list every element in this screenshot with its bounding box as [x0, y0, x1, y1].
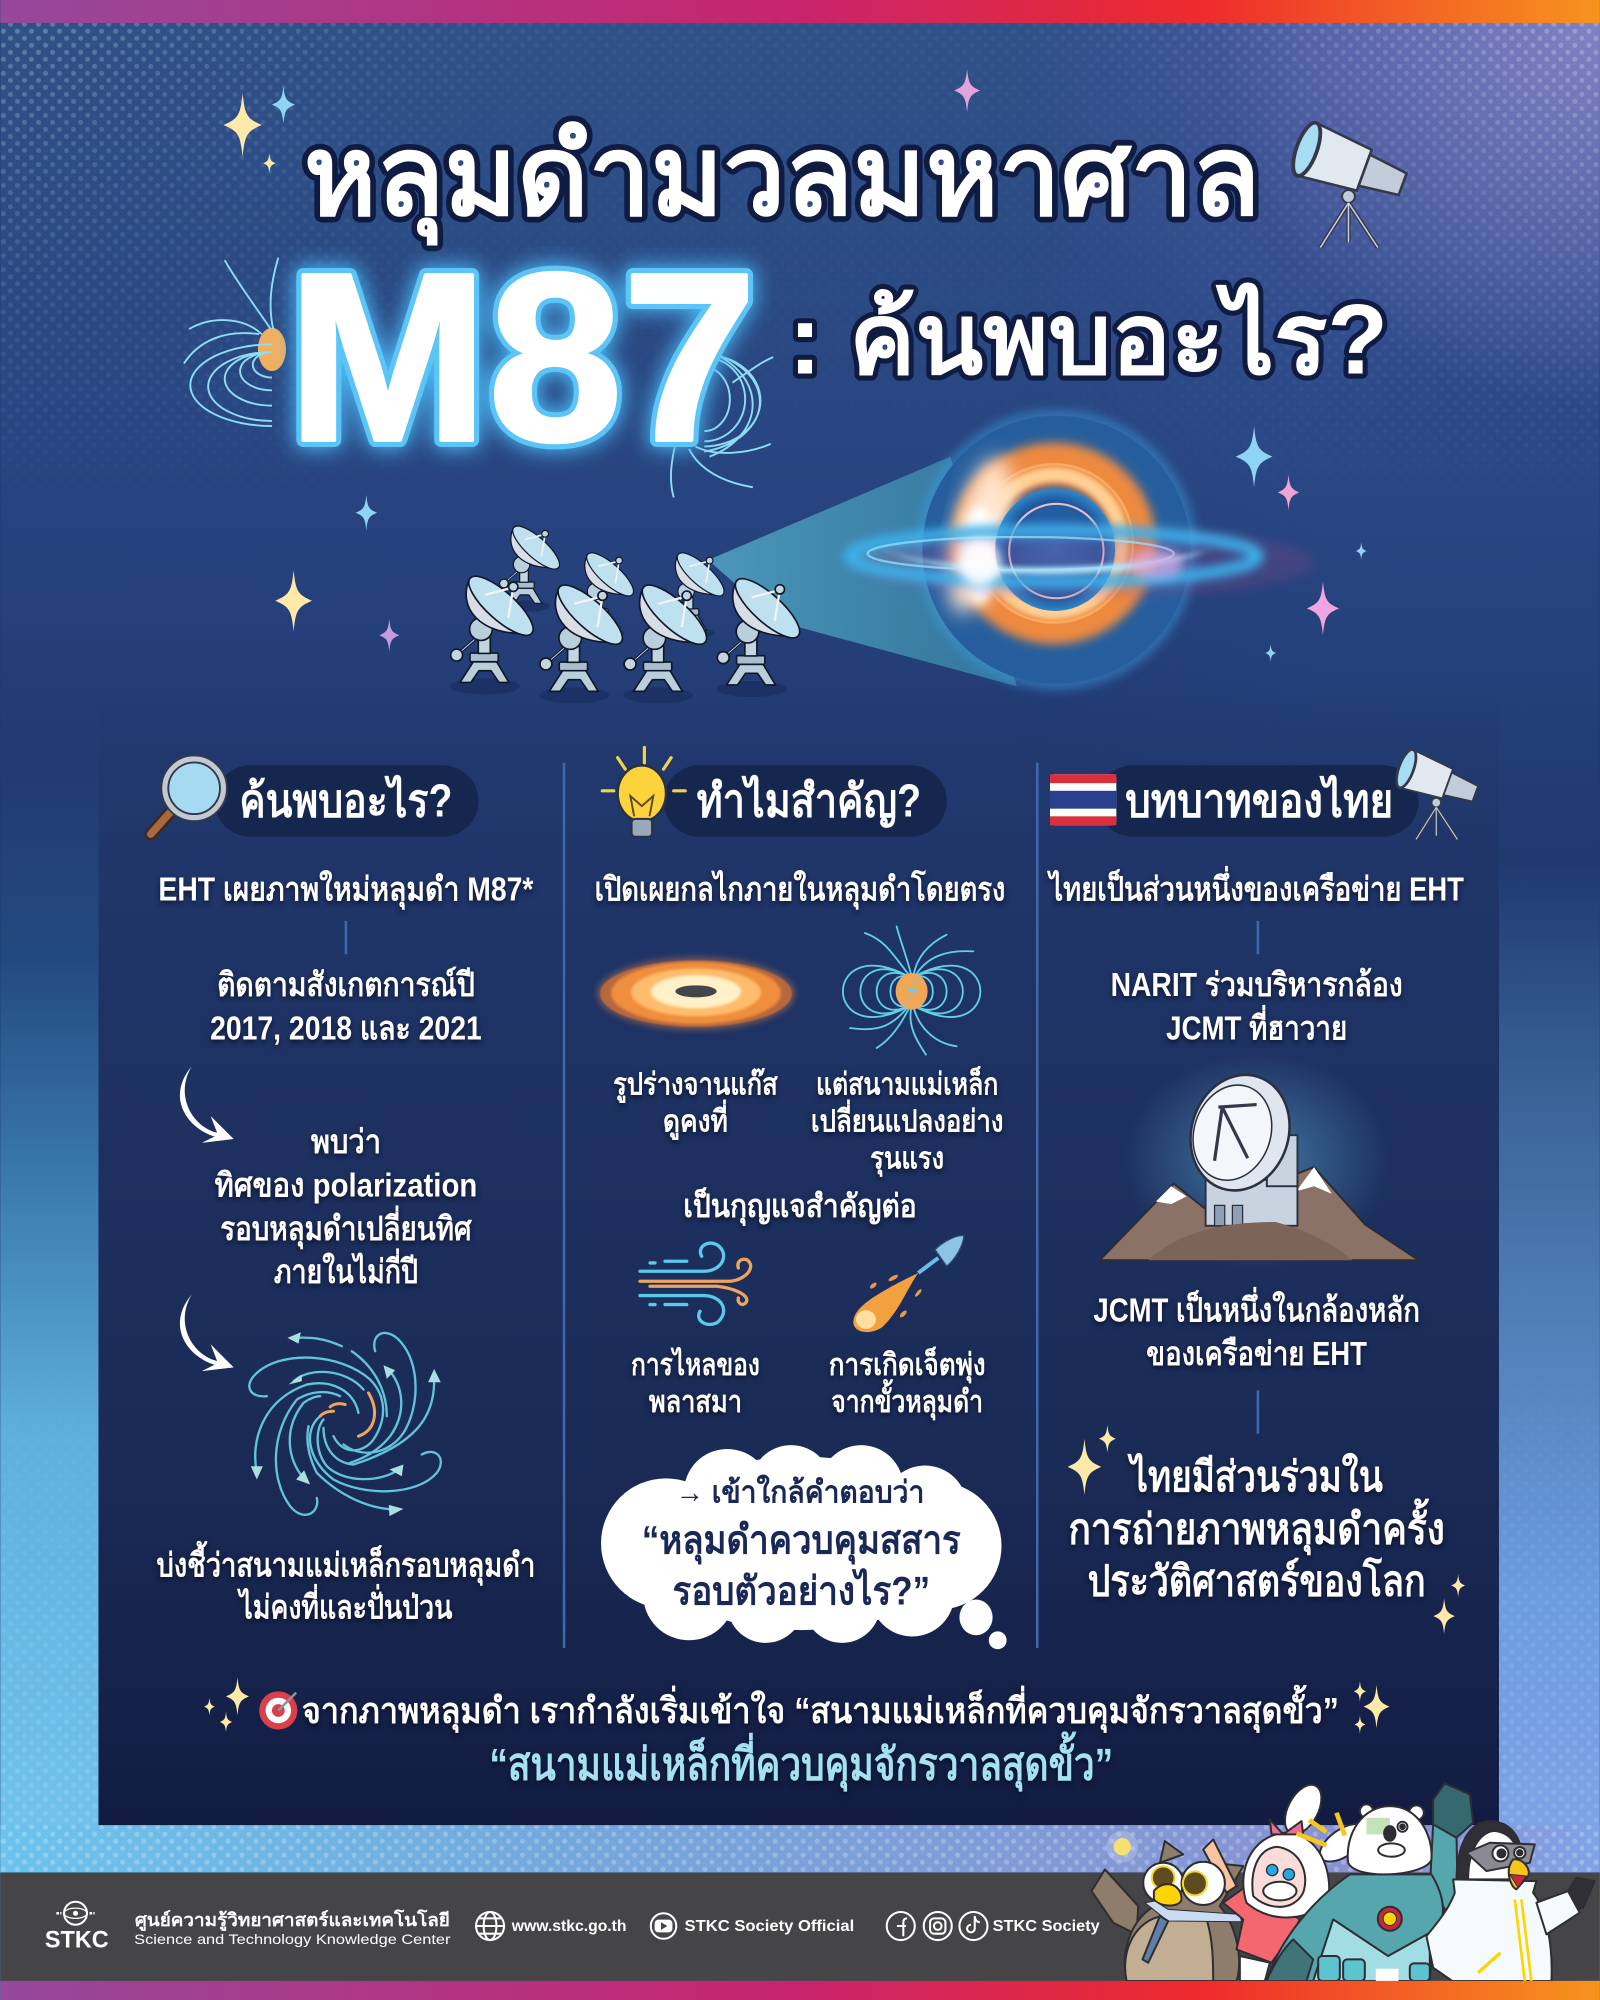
- footer: STKC logo: STKC: [45, 1927, 109, 1954]
- halftone strip under panel: [0, 1825, 1600, 1874]
- text: network: [1047, 866, 1464, 1048]
- footer: youtube: [651, 1913, 854, 1939]
- text: mechanism: เปิดเผยกลไกภายในหลุมดำโดยตรง: [595, 870, 1005, 911]
- icon: plasma flow: [640, 1243, 751, 1324]
- mascot: rabbit girl: [1223, 1779, 1373, 1981]
- text: column 1 top: พบว่า: [311, 1124, 381, 1161]
- text: column 1 top: ทิศของ polarization: [215, 1167, 477, 1204]
- footer: youtube: STKC Society Official: [685, 1918, 854, 1935]
- text: plasma and jet captions: จากขั้วหลุมดำ: [831, 1379, 983, 1421]
- decorative stars: [223, 69, 1367, 662]
- mascot: penguin: [1426, 1821, 1595, 1981]
- text: column 1 top: รอบหลุมดำเปลี่ยนทิศ: [220, 1205, 472, 1250]
- illustration: turbulent spiral: [249, 1332, 441, 1516]
- text: column 1 bottom: ไม่คงที่และปั่นป่วน: [237, 1584, 453, 1627]
- heading pill: Thai role: บทบาทของไทย: [1125, 774, 1393, 826]
- text: disc and field captions: ดูคงที่: [663, 1099, 728, 1140]
- sparkles column 3: [1068, 1425, 1465, 1634]
- title line 2: : ค้นพบอะไร?: [789, 283, 1388, 396]
- text: JCMT note: JCMT เป็นหนึ่งในกล้องหลัก: [1093, 1286, 1420, 1329]
- heading pill: Thai role: [1097, 765, 1419, 837]
- column 3: Thailand's role: [1047, 747, 1482, 1634]
- icon: target: [259, 1691, 297, 1730]
- text: network: ไทยเป็นส่วนหนึ่งของเครือข่าย EHT: [1047, 866, 1464, 909]
- footer: organisation name: ศูนย์ความรู้วิทยาศาสตร์และเทคโนโลยี: [135, 1909, 450, 1932]
- text: JCMT note: ของเครือข่าย EHT: [1146, 1336, 1367, 1373]
- text: Thai contribution highlight: [1068, 1452, 1445, 1605]
- icon: light bulb: [602, 747, 685, 837]
- illustration: telescope beam: [708, 457, 1017, 686]
- text: column 1 top: 2017, 2018 และ 2021: [210, 1011, 482, 1048]
- conclusion line: จากภาพหลุมดำ เรากำลังเริ่มเข้าใจ “สนามแม่เหล็กที่ควบคุมจักรวาลสุดขั้ว”: [302, 1684, 1339, 1733]
- heading pill: why important: [664, 765, 947, 837]
- callout: thought cloud: รอบตัวอย่างไร?”: [672, 1568, 930, 1614]
- main dark panel: [98, 689, 1499, 1825]
- column 2: why it matters: [595, 747, 1007, 1649]
- icon: magnetic field right of M87: [671, 352, 773, 497]
- heading pill: discovered: [215, 765, 479, 837]
- text: disc and field captions: เป็นกุญแจสำคัญต่อ: [683, 1186, 917, 1227]
- top gradient bar: [0, 0, 1600, 23]
- text: column 1 bottom: บ่งชี้ว่าสนามแม่เหล็กรอบหลุมดำ: [157, 1541, 535, 1587]
- illustration: black hole: [850, 409, 1314, 690]
- illustration: magnetic field: [843, 926, 980, 1055]
- column dividers: [564, 763, 1037, 1648]
- heading pill: discovered: ค้นพบอะไร?: [239, 774, 452, 826]
- footer: website: www.stkc.go.th: [511, 1918, 627, 1935]
- text: disc and field captions: เปลี่ยนแปลงอย่าง: [811, 1099, 1003, 1138]
- text: Thai contribution highlight: ไทยมีส่วนร่วมใน: [1127, 1452, 1383, 1500]
- conclusion highlight: “สนามแม่เหล็กที่ควบคุมจักรวาลสุดขั้ว”: [489, 1730, 1113, 1792]
- icon: Thai flag: [1050, 774, 1116, 825]
- text: disc and field captions: [613, 1065, 1003, 1227]
- mascot: polar bear: [1267, 1783, 1473, 1981]
- icon: magnetic field left of M87: [184, 258, 286, 426]
- mascot: owl: [1092, 1839, 1243, 1981]
- text: disc and field captions: รุนแรง: [870, 1141, 944, 1177]
- text: plasma and jet captions: การไหลของ: [631, 1346, 760, 1382]
- text: column 1 top: EHT เผยภาพใหม่หลุมดำ M87*: [158, 870, 533, 911]
- mascots group: [1092, 1779, 1595, 1981]
- text: disc and field captions: รูปร่างจานแก๊ส: [613, 1067, 778, 1103]
- text: column 1 top: ติดตามสังเกตการณ์ปี: [217, 966, 475, 1004]
- footer: organisation name: [134, 1909, 451, 1947]
- illustration: JCMT on mountain: [1100, 1052, 1419, 1269]
- bottom sparkles: [204, 1677, 1390, 1733]
- text: plasma and jet captions: การเกิดเจ็ตพุ่ง: [829, 1346, 986, 1384]
- bottom gradient bar: [0, 1981, 1600, 2000]
- mascot glow bulb: [1106, 1831, 1138, 1863]
- illustration: radio dish array: [450, 520, 808, 703]
- callout: thought cloud: [601, 1445, 1007, 1649]
- text: network: JCMT ที่ฮาวาย: [1166, 1005, 1347, 1048]
- text: column 1 top: [158, 870, 533, 1291]
- icon: jet rocket: [853, 1236, 964, 1332]
- footer: social icons: STKC Society: [993, 1918, 1100, 1935]
- text: column 1 bottom: [157, 1541, 535, 1627]
- column 1: what was found: [151, 759, 535, 1627]
- text: disc and field captions: แต่สนามแม่เหล็ก: [816, 1065, 998, 1101]
- text: Thai contribution highlight: การถ่ายภาพหลุมดำครั้ง: [1068, 1497, 1445, 1555]
- illustration: gas disc: [596, 956, 796, 1031]
- arrow: curved white 1: [180, 1066, 234, 1143]
- footer bar: [0, 1872, 1600, 1982]
- text: Thai contribution highlight: ประวัติศาสตร์ของโลก: [1088, 1557, 1426, 1605]
- icon: magnifying glass: [151, 759, 223, 834]
- text: plasma and jet captions: [631, 1346, 986, 1421]
- title M87 glow: M87: [287, 223, 757, 491]
- footer: STKC logo: [45, 1902, 109, 1954]
- title M87 glow: M87: [287, 223, 757, 491]
- text: JCMT note: [1093, 1286, 1420, 1373]
- arrow: curved white 2: [180, 1295, 234, 1371]
- text: plasma and jet captions: พลาสมา: [649, 1385, 742, 1419]
- title M87 glow: M87: [287, 223, 757, 491]
- title line 1: หลุมดำมวลมหาศาล: [304, 112, 1260, 246]
- icon: telescope by title: [1288, 119, 1412, 247]
- text: network: NARIT ร่วมบริหารกล้อง: [1111, 967, 1403, 1004]
- callout: thought cloud: “หลุมดำควบคุมสสาร: [642, 1519, 961, 1565]
- icon: telescope heading: [1392, 747, 1482, 839]
- footer: social icons: [887, 1912, 1100, 1940]
- footer: website: [476, 1912, 627, 1940]
- footer: organisation name: Science and Technology Knowledge Center: [134, 1931, 451, 1947]
- text: column 1 top: ภายในไม่กี่ปี: [274, 1248, 418, 1291]
- callout: thought cloud: → เข้าใกล้คำตอบว่า: [676, 1475, 924, 1510]
- heading pill: why important: ทำไมสำคัญ?: [697, 774, 921, 827]
